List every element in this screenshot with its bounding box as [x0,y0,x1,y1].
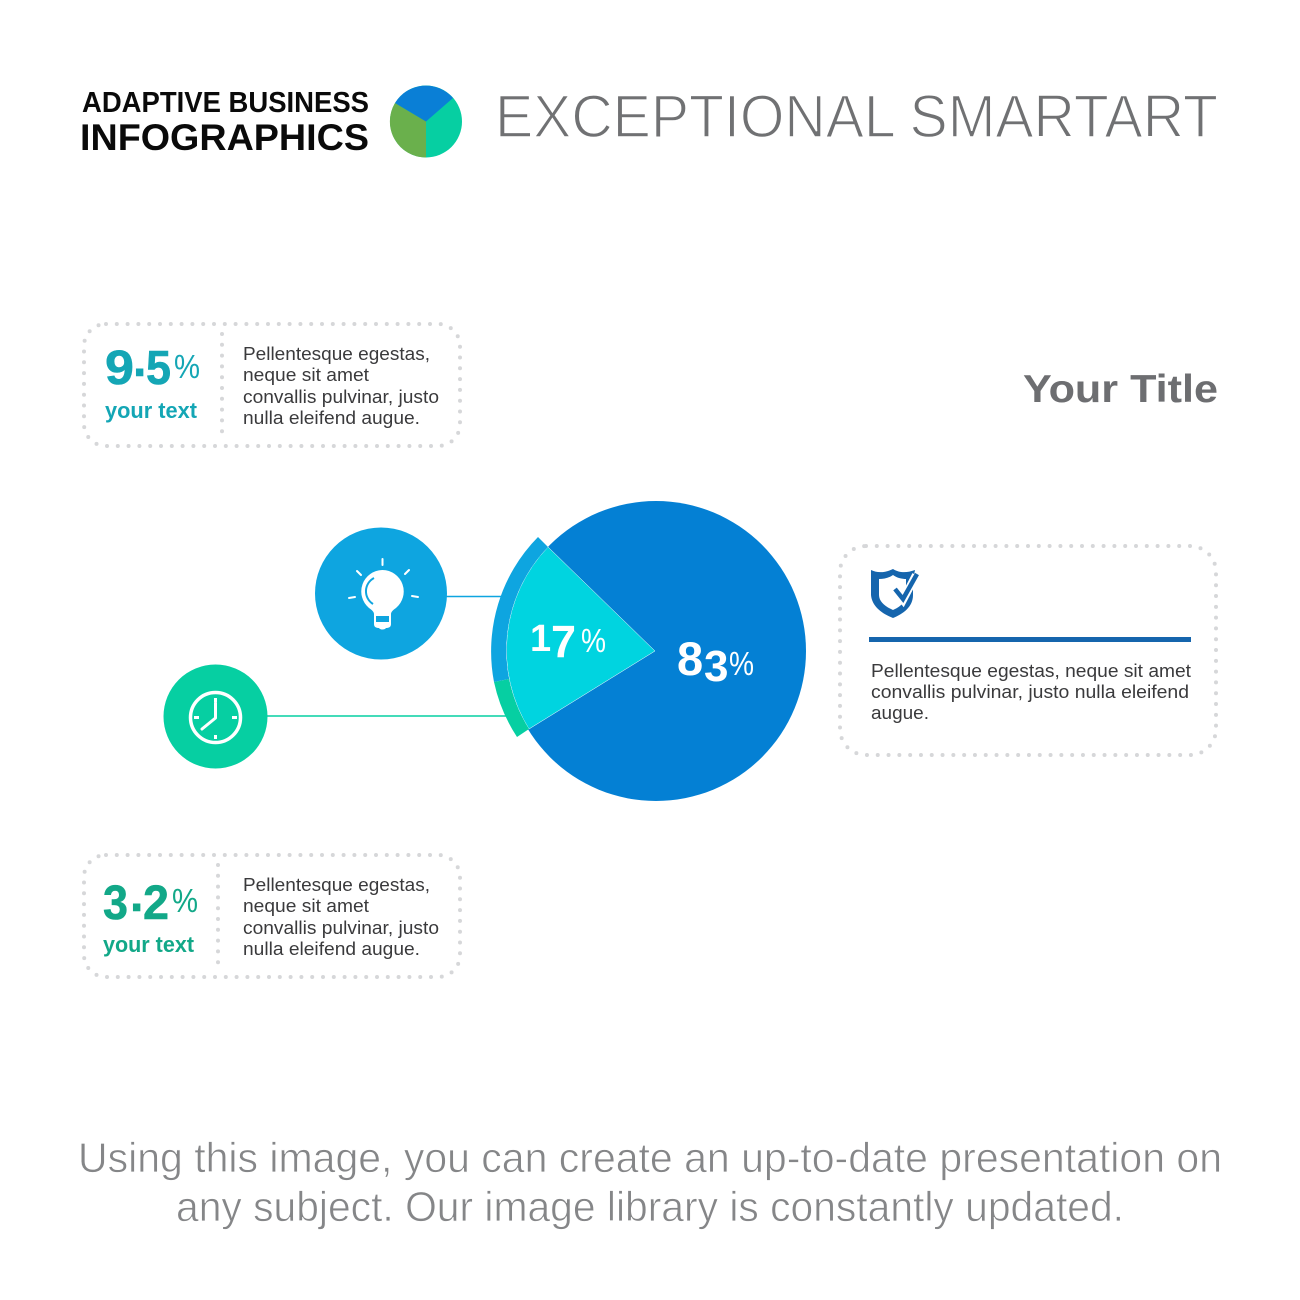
header tagline: EXCEPTIONAL SMARTART [495,83,1218,150]
stat symbol: % [174,348,200,385]
header label: adaptive business infographics [80,87,369,158]
text block: Pellentesque egestas, neque sit amet [871,661,1191,681]
panel: shield description [840,546,1216,755]
header label: adaptive business infographics: ADAPTIVE BUSINESS [82,87,369,119]
outer arc: 9.5 percent [491,537,548,682]
icon: logo pie [390,86,462,158]
footer text [78,1134,1222,1230]
text block: convallis pulvinar, justo [243,918,439,938]
stat: 3.2%: 2 [143,877,169,930]
stat label: your text [105,398,198,423]
stat: 9.5%: . [133,334,146,387]
text block: Pellentesque egestas, [243,875,430,895]
text block: neque sit amet [243,365,369,385]
label: 83%: 3 [704,642,728,691]
slice: 17 percent [506,547,655,729]
icon: clock [164,664,268,768]
connector: clock to pie [266,715,506,717]
footer text: any subject. Our image library is constantly updated. [176,1183,1124,1230]
connector: bulb to pie [446,596,502,598]
stat: 3.2%: . [130,869,143,922]
label: 17%: 7 [551,616,576,667]
stat: 3.2%: 3 [103,877,128,930]
label: 83% symbol: % [729,645,754,682]
text block [243,875,439,959]
pie chart [491,501,806,801]
panel: 3.2 percent [84,855,460,977]
text block: nulla eleifend augue. [243,939,420,959]
text block: augue. [871,703,929,723]
text block: convallis pulvinar, justo [243,387,439,407]
header [80,83,1218,158]
stat: 9.5%: 5 [146,342,171,395]
text block [243,344,439,428]
stat: 9.5%: 9 [105,342,134,395]
text block [871,661,1191,723]
icon: light bulb [315,528,447,660]
panel: 9.5 percent [84,324,460,446]
slice: 83 percent [506,501,806,801]
text block: convallis pulvinar, justo nulla eleifend [871,682,1189,702]
outer arc: 3.2 percent [494,679,529,737]
text block: nulla eleifend augue. [243,408,420,428]
divider bar [869,637,1191,642]
stat label: your text [103,932,195,957]
icon: shield with check [871,569,917,618]
heading: your title: Your Title [1023,368,1218,411]
stat symbol: % [172,882,198,919]
text block: Pellentesque egestas, [243,344,430,364]
label: 17%: 1 [530,618,551,660]
header label: adaptive business infographics: INFOGRAPHICS [80,117,369,158]
text block: neque sit amet [243,896,369,916]
label: 17% symbol: % [581,622,606,659]
label: 83%: 8 [677,632,703,685]
footer text: Using this image, you can create an up-to-date presentation on [78,1134,1222,1181]
